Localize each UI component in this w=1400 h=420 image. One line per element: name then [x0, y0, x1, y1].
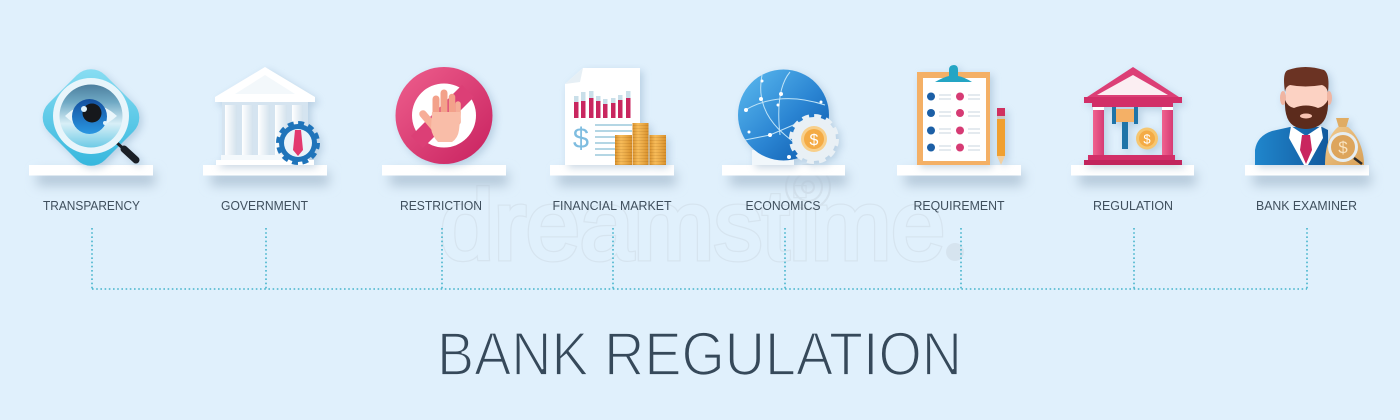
- item: government: [203, 67, 329, 213]
- item: bank examiner: [1245, 67, 1371, 213]
- item: requirement: [897, 65, 1023, 213]
- icon: pink bank with gavel: [1084, 67, 1182, 165]
- label: REGULATION: [1093, 198, 1173, 213]
- title: BANK REGULATION: [437, 320, 962, 388]
- icon: white bank with gear: [215, 67, 318, 165]
- label: FINANCIAL MARKET: [552, 198, 672, 213]
- icon: stop hand: [396, 67, 492, 164]
- icon: globe and gear: $: [810, 132, 819, 149]
- icon: pink bank with gavel: $: [1143, 132, 1151, 146]
- icon: clipboard and pencil: [917, 65, 1005, 165]
- icon: report and coins: [565, 68, 666, 165]
- item: financial market: [550, 68, 676, 213]
- icon: globe and gear: [738, 70, 837, 165]
- item: economics: [722, 70, 847, 213]
- item: transparency: [29, 61, 155, 213]
- watermark: dreamstime: [440, 170, 945, 280]
- icon: report and coins: $: [573, 123, 589, 155]
- label: REQUIREMENT: [914, 198, 1005, 213]
- icon: banker with money bag: [1255, 67, 1364, 165]
- label: GOVERNMENT: [221, 198, 308, 213]
- connector: dotted lines: [92, 228, 1307, 289]
- icon: magnifier over eye: [34, 61, 148, 174]
- label: RESTRICTION: [400, 198, 482, 213]
- item: regulation: [1071, 67, 1196, 213]
- label: BANK EXAMINER: [1256, 198, 1357, 213]
- watermark: dreamstime: [440, 170, 945, 280]
- icon: banker with money bag: $: [1338, 138, 1348, 157]
- item: restriction: [382, 67, 508, 213]
- label: TRANSPARENCY: [43, 198, 140, 213]
- label: ECONOMICS: [746, 198, 821, 213]
